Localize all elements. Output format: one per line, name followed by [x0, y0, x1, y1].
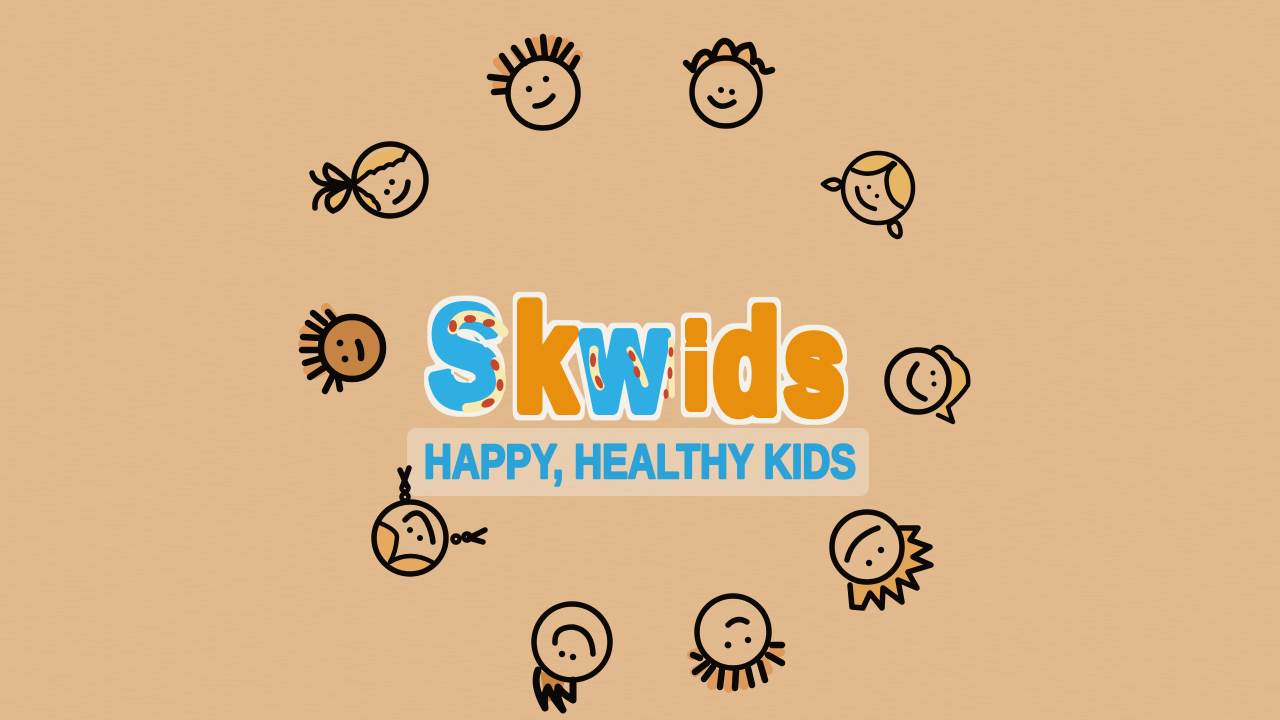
logo: Skwids: S	[431, 280, 500, 432]
logo: Skwids: i	[685, 306, 708, 429]
logo: Skwids: s	[785, 287, 843, 440]
logo: Skwids: w	[583, 283, 666, 437]
logo: Skwids: d	[714, 285, 779, 441]
face: girl with bow, upper left	[312, 144, 426, 216]
tagline banner	[407, 428, 869, 496]
logo pattern: w snake	[590, 340, 674, 399]
face: brown boy, left	[302, 308, 383, 391]
logo: Skwids: k	[515, 279, 575, 438]
face: girl with ponytail, right	[887, 347, 968, 422]
face: boy with fringe, bottom centre	[692, 596, 782, 688]
logo pattern: S snake	[449, 315, 504, 410]
face: spiky hair boy, top left	[490, 37, 578, 128]
face: girl with braids, lower left	[373, 468, 485, 575]
face: girl with pigtails, upper right	[823, 153, 913, 237]
logo detail: i dot gap	[680, 347, 714, 351]
logo: Skwids	[431, 279, 843, 441]
face: boy with tuft, bottom left	[534, 604, 610, 710]
face: curly hair boy, top right	[686, 41, 772, 126]
tagline text: HAPPY, HEALTHY KIDS	[424, 436, 856, 489]
face: spiky hair kid, lower right	[832, 512, 931, 608]
